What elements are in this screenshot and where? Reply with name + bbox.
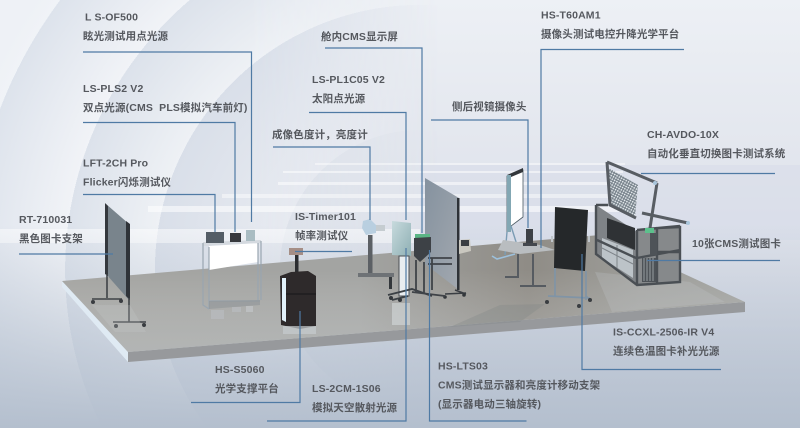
label: IS-CCXL-2506-IR V4: [613, 326, 720, 358]
platform floor: [62, 235, 745, 362]
label: HS-S5060: [215, 364, 279, 395]
label: LS-2CM-1S06: 模拟天空散射光源: [312, 401, 398, 414]
label: IS-CCXL-2506-IR V4: 连续色温图卡补光光源: [613, 344, 720, 358]
label: LS-PLS2 V2: LS-PLS2 V2: [83, 83, 143, 95]
equipment: black chart stand with light: [545, 207, 592, 308]
label: LFT-2CH Pro: LFT-2CH Pro: [83, 158, 148, 170]
label: LS-PL1C05 V2: [312, 74, 385, 105]
label: LFT-2CH Pro: [83, 158, 172, 188]
label: HS-LTS03: HS-LTS03: [438, 360, 488, 372]
label: LS-PL1C05 V2: 太阳点光源: [312, 92, 366, 105]
equipment: table with instruments: [203, 230, 261, 319]
label: colorimeter and luminance meter: 成像色度计，亮度计: [272, 128, 368, 141]
label: IS-CCXL-2506-IR V4: IS-CCXL-2506-IR V4: [613, 326, 714, 338]
label: HS-T60AM1: [541, 10, 679, 40]
label: LS-PL1C05 V2: LS-PL1C05 V2: [312, 74, 385, 86]
label: HS-LTS03: [438, 360, 601, 410]
label: RT-710031: [19, 214, 83, 245]
label: IS-Timer101: [295, 211, 356, 242]
equipment: camera rig: [412, 234, 452, 296]
label: CH-AVDO-10X: CH-AVDO-10X: [647, 129, 719, 141]
label: side mirror camera: 侧后视镜摄像头: [452, 100, 527, 113]
label: cabin CMS display: 舱内CMS显示屏: [321, 30, 398, 43]
label: LS-PLS2 V2: [83, 83, 248, 114]
label: IS-Timer101: 帧率测试仪: [295, 229, 349, 242]
label: LS-2CM-1S06: LS-2CM-1S06: [312, 383, 381, 395]
label: IS-Timer101: IS-Timer101: [295, 211, 356, 223]
label: HS-S5060: HS-S5060: [215, 364, 265, 376]
label: CH-AVDO-10X: 自动化垂直切换图卡测试系统: [647, 147, 786, 160]
label: L S-OF500: [83, 12, 169, 42]
label: LS-PLS2 V2: 双点光源(CMS PLS模拟汽车前灯): [83, 101, 248, 114]
label: HS-S5060: 光学支撑平台: [215, 382, 279, 395]
label: LFT-2CH Pro: Flicker闪烁测试仪: [83, 176, 172, 188]
equipment: optical support platform: [280, 248, 316, 334]
equipment: display mobile stand: [388, 221, 432, 325]
equipment: automatic chart switching system: [596, 162, 690, 285]
equipment: luminance meter tripod: [358, 219, 394, 289]
label: CH-AVDO-10X: [647, 129, 786, 160]
equipment: large gray board with monitor: [425, 178, 471, 299]
label: HS-LTS03: CMS测试显示器和亮度计移动支架: [438, 378, 601, 392]
label: RT-710031: 黑色图卡支架: [19, 232, 83, 245]
label: LS-2CM-1S06: [312, 383, 398, 414]
label: L S-OF500: L S-OF500: [85, 12, 138, 24]
label: 10 CMS test charts: 10张CMS测试图卡: [692, 237, 781, 250]
equipment: black chart stand: [91, 203, 146, 332]
label: HS-T60AM1: 摄像头测试电控升降光学平台: [541, 28, 679, 40]
label: L S-OF500: 眩光测试用点光源: [83, 30, 169, 42]
label: RT-710031: RT-710031: [19, 214, 72, 226]
equipment: rear-view camera mirror and desk: [492, 168, 555, 286]
label: HS-LTS03: (显示器电动三轴旋转): [438, 398, 541, 410]
label: HS-T60AM1: HS-T60AM1: [541, 10, 601, 22]
